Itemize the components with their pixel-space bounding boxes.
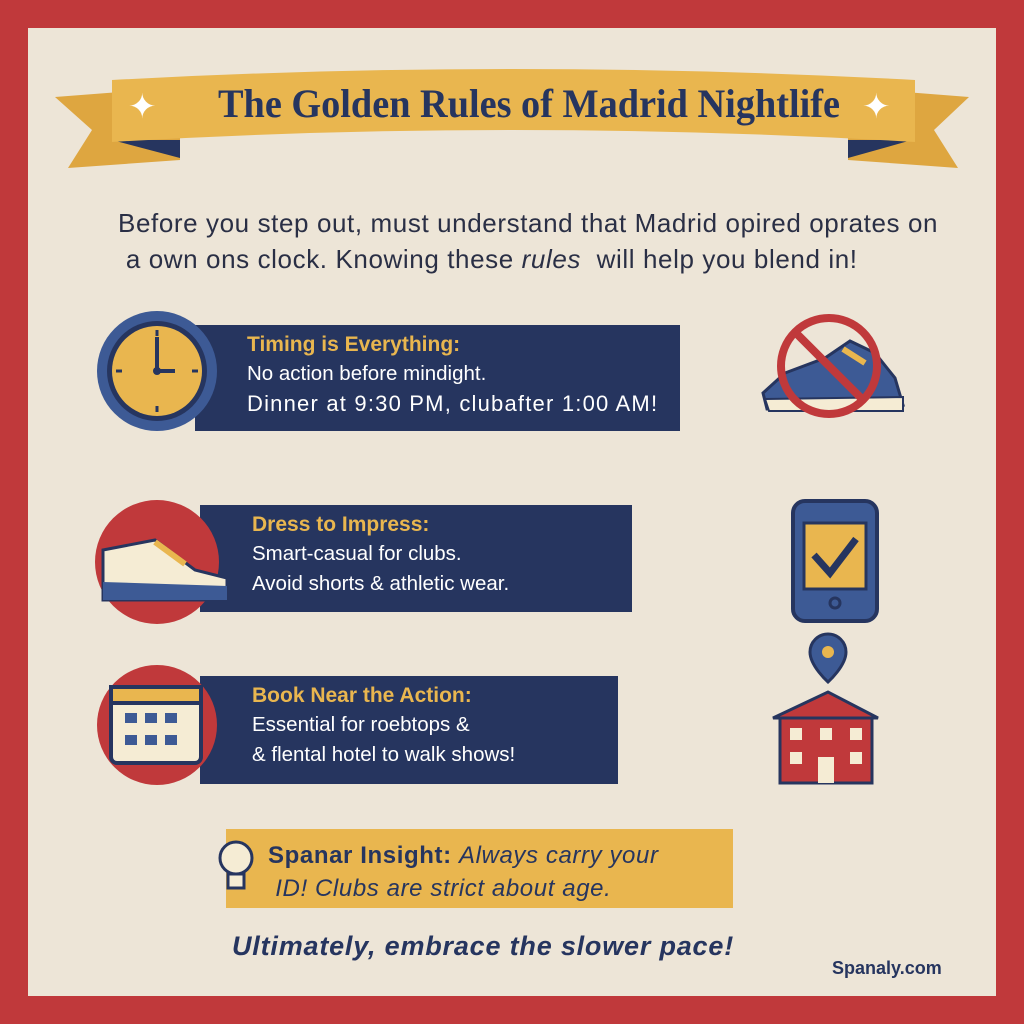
panel: timing	[195, 325, 680, 431]
panel: booking: & flental hotel to walk shows!	[252, 743, 515, 766]
icon: shoe	[95, 500, 227, 624]
panel: booking	[200, 676, 618, 784]
title banner	[55, 69, 969, 168]
callout: insight: ID! Clubs are strict about age.	[275, 875, 611, 902]
title banner: The Golden Rules of Madrid Nightlife	[218, 81, 840, 126]
icon: hotel	[772, 632, 879, 784]
callout: insight: Spanar Insight: Always carry your	[268, 842, 659, 869]
panel: dress: Avoid shorts & athletic wear.	[252, 572, 509, 595]
icon: calendar	[97, 665, 217, 785]
intro text: Before you step out, must understand that Madrid opired oprates on	[118, 208, 938, 238]
callout: insight	[226, 829, 733, 908]
panel: timing: Timing is Everything:	[247, 333, 460, 356]
panel: dress: Dress to Impress:	[252, 513, 429, 536]
title banner: ✦	[862, 88, 890, 126]
panel: timing: Dinner at 9:30 PM, clubafter 1:00 AM!	[247, 391, 658, 416]
icon: light bulb	[218, 840, 254, 890]
panel: timing: No action before mindight.	[247, 362, 486, 385]
title banner: ✦	[128, 88, 156, 126]
panel: dress: Smart-casual for clubs.	[252, 542, 462, 565]
intro text: a own ons clock. Knowing these rules will help you blend in!	[126, 244, 858, 274]
icon: clock	[97, 311, 217, 431]
footer tagline: Ultimately, embrace the slower pace!	[232, 931, 734, 961]
icon: phone check	[791, 499, 879, 623]
intro text	[118, 208, 938, 274]
brand: Spanaly.com	[832, 958, 942, 978]
icon: no sneakers	[761, 314, 905, 418]
panel: dress	[200, 505, 632, 612]
panel: booking: Book Near the Action:	[252, 684, 472, 707]
panel: booking: Essential for roebtops &	[252, 713, 470, 736]
